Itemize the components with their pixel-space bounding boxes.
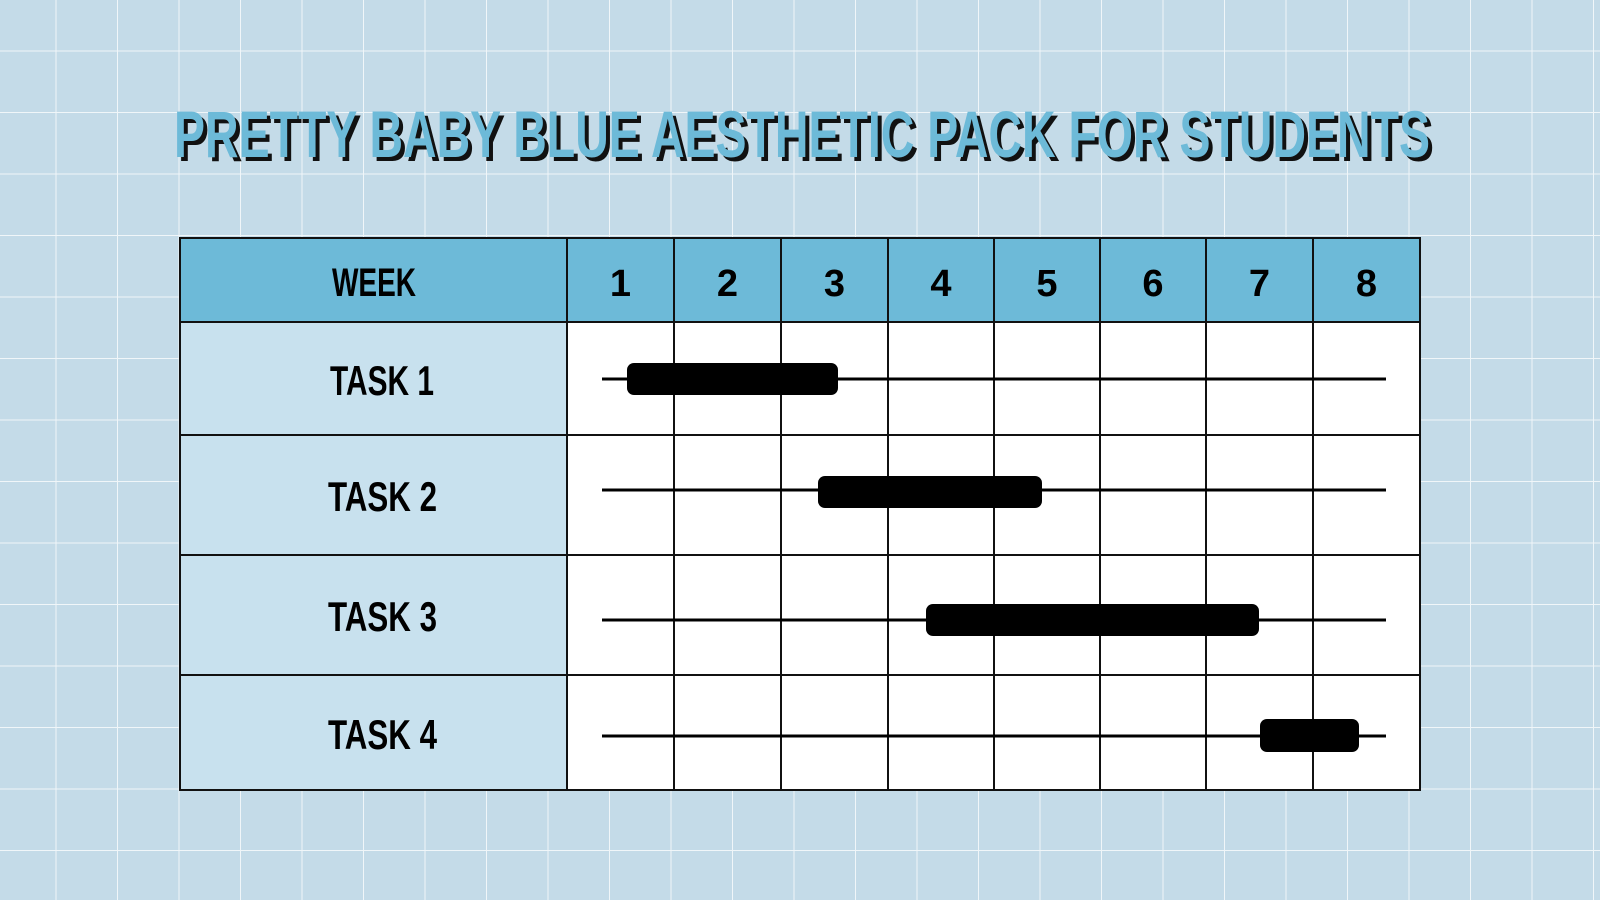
- task label column: TASK 3: [328, 593, 437, 640]
- header row: 6: [1142, 263, 1164, 305]
- task label column: [180, 322, 1420, 790]
- task label column: TASK 4: [328, 711, 437, 758]
- bar: task 4 weeks 7-8: [602, 719, 1386, 752]
- header row: 7: [1249, 263, 1270, 305]
- bar: task 3 weeks 4-7: [602, 604, 1386, 636]
- header row: 8: [1356, 263, 1377, 305]
- header row: 4: [930, 263, 952, 305]
- bar: task 1 weeks 1-3: [602, 363, 1386, 395]
- task label column: TASK 1: [330, 357, 434, 404]
- bar: task 2 weeks 3-5: [602, 476, 1386, 508]
- header row: 3: [824, 263, 845, 305]
- header row: 5: [1036, 263, 1058, 305]
- header row: [180, 238, 1420, 322]
- header row: 1: [610, 263, 631, 305]
- header row: 2: [717, 263, 738, 305]
- task label column: TASK 2: [328, 473, 437, 520]
- header row: WEEK: [332, 261, 416, 305]
- gantt table: [180, 238, 1420, 790]
